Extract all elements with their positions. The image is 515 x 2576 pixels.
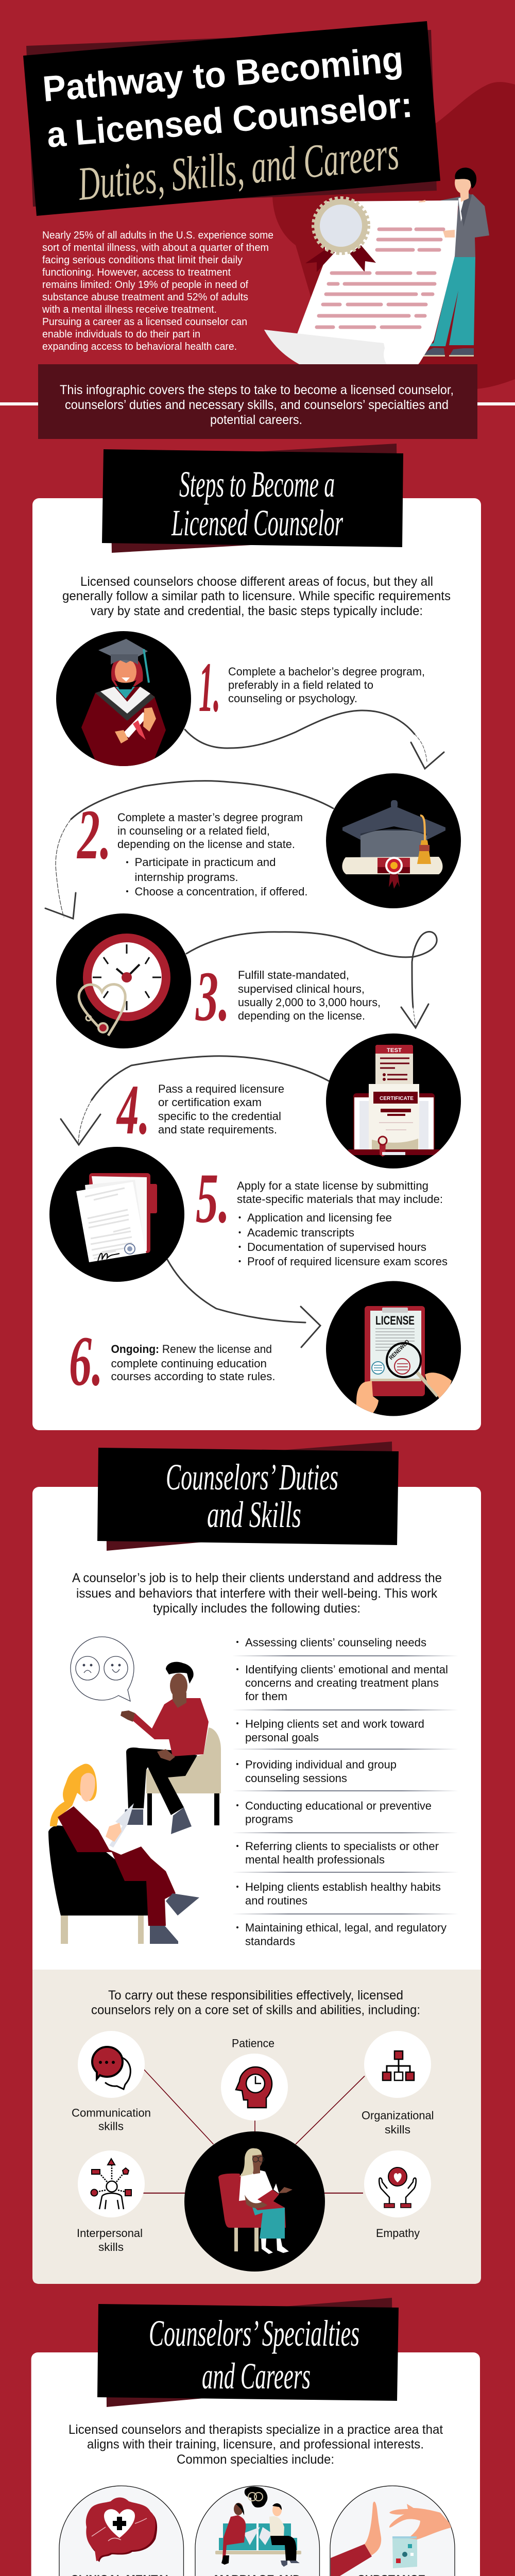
step text: and state requirements. [158,1123,277,1136]
step text [228,665,425,705]
skill: interpersonal [77,2150,145,2253]
skill connector lines [142,2067,365,2193]
intro paragraph: Nearly 25% of all adults in the U.S. experience some [42,230,273,241]
step text: Complete a master’s degree program [117,811,303,824]
illustration: counselor in chair [184,2131,325,2272]
card: clinical mental health [59,2486,183,2576]
duties intro text [72,1571,442,1616]
label: Interpersonal [77,2227,143,2240]
duties list: Identifying clients’ emotional and mental [245,1663,448,1676]
icon: test and certificate [348,1045,440,1157]
duties list: Conducting educational or preventive [245,1799,432,1812]
white divider [0,402,515,405]
skill: communication [72,2031,151,2133]
skill: patience [221,2037,288,2121]
step text: Choose a concentration, if offered. [135,885,308,898]
illustration: counseling session [48,1637,221,1944]
skill: empathy [364,2150,431,2240]
panel: specialties card [31,2352,480,2576]
duties intro text: issues and behaviors that interfere with their well-being. This work [76,1586,437,1601]
illustration: man holding diploma scroll [264,167,489,370]
duties list: programs [245,1812,293,1826]
duties list: Providing individual and group [245,1758,397,1771]
step text: Application and licensing fee [247,1211,392,1224]
label: Organizational [362,2109,434,2122]
intro paragraph: substance abuse treatment and 52% of adults [42,292,248,303]
specialties intro text: Licensed counselors and therapists specialize in a practice area that [68,2422,443,2437]
intro paragraph: Pursuing a career as a licensed counselor can [42,316,247,328]
intro callout box: potential careers. [210,413,302,427]
steps intro text: vary by state and credential, the basic steps typically include: [91,604,423,618]
step text: Academic transcripts [247,1226,354,1239]
step text [237,1179,448,1268]
label: Empathy [376,2227,420,2240]
label: Communication [72,2106,151,2120]
heading: specialties [97,2298,399,2407]
duties list: Assessing clients’ counseling needs [245,1636,426,1649]
step text: state-specific materials that may include: [237,1193,443,1206]
step number: 2. [77,795,111,874]
duties list: for them [245,1690,287,1703]
step 5 [49,1147,448,1282]
icon: graduate [81,639,166,768]
panel: steps card [32,498,481,1430]
card: marriage and family [195,2486,319,2576]
icon: license clipboard: LICENSE [375,1314,415,1328]
step 3 [56,913,381,1048]
intro callout box: This infographic covers the steps to take to become a licensed counselor, [60,383,454,397]
step text: usually 2,000 to 3,000 hours, [238,996,381,1009]
step text: counseling or psychology. [228,692,357,705]
specialties intro text [68,2422,443,2467]
label [362,2109,434,2136]
intro paragraph [42,230,273,352]
intro callout box [38,364,477,439]
step text: in counseling or a related field, [117,824,270,837]
step text: courses according to state rules. [111,1370,275,1383]
duties list: Maintaining ethical, legal, and regulatory [245,1921,447,1934]
duties list: personal goals [245,1731,319,1744]
background blob [272,82,515,389]
step 2 [77,773,461,908]
duties intro text: A counselor’s job is to help their clients understand and address the [72,1571,442,1585]
specialties intro text: Common specialties include: [177,2452,334,2467]
step number: 3. [195,957,230,1036]
heading: specialties: and Careers [202,2355,311,2397]
step text: Fulfill state-mandated, [238,969,349,981]
heading: duties: Counselors’ Duties [166,1456,338,1498]
panel: duties and skills card [32,1487,481,2284]
arrow: step 4 to 5 [61,1056,329,1145]
steps intro text [62,574,451,618]
label: Patience [232,2037,274,2049]
heading: steps: Licensed Counselor [171,502,344,544]
skills intro text: counselors rely on a core set of skills and abilities, including: [91,2003,420,2018]
steps intro text: Licensed counselors choose different areas of focus, but they all [80,574,433,589]
duties list: mental health professionals [245,1853,385,1866]
step 6 [69,1281,461,1419]
icon: brain with heart [86,2498,157,2562]
intro paragraph: sort of mental illness, with about a quarter of them [42,242,269,253]
step text [238,969,381,1022]
step text: Pass a required licensure [158,1082,284,1095]
step number: 4. [116,1070,150,1149]
step text: supervised clinical hours, [238,982,365,995]
skills intro text: To carry out these responsibilities effectively, licensed [108,1988,403,2003]
title line 1: Pathway to Becoming [41,39,405,109]
duties list: counseling sessions [245,1772,347,1785]
step text: specific to the credential [158,1110,281,1123]
illustration: refusing drugs [331,2502,453,2576]
step text: Documentation of supervised hours [247,1241,426,1253]
label [72,2106,151,2133]
duties list: concerns and creating treatment plans [245,1676,439,1689]
arrow: step 2 to 3 [45,781,333,919]
duties list [232,1636,460,1947]
steps intro text: generally follow a similar path to licensure. While specific requirements [62,589,451,603]
duties list: and routines [245,1894,307,1907]
icon: test and certificate: TEST [387,1047,402,1054]
icon: graduation cap and diploma [342,800,445,889]
heading: steps: Steps to Become a [179,464,335,505]
skills intro text [91,1988,420,2018]
intro paragraph: with a mental illness receive treatment. [42,304,217,315]
illustration: couple on sofa [215,2486,301,2567]
intro paragraph: enable individuals to do their part in [42,329,200,340]
woman [48,1825,148,1916]
step text: Participate in practicum and [135,856,276,869]
duties list: Helping clients establish healthy habits [245,1880,441,1893]
arrow: step 1 to 2 [185,710,444,769]
specialties intro text: aligns with their training, licensure, and professional interests. [87,2437,424,2451]
step text: Apply for a state license by submitting [237,1179,428,1192]
chair [146,1727,221,1793]
heading: duties [97,1442,399,1551]
label: skills [385,2123,410,2136]
intro paragraph: functioning. However, access to treatment [42,267,231,278]
step text: Complete a bachelor’s degree program, [228,665,425,678]
skill: organizational [362,2031,434,2136]
arrow: step 5 to 6 [167,1260,320,1347]
step text [158,1082,284,1136]
duties intro text: typically includes the following duties: [153,1601,360,1616]
icon: license clipboard [355,1306,452,1419]
step text [117,811,308,898]
duties list: Helping clients set and work toward [245,1718,424,1730]
title line 2: a Licensed Counselor: [45,84,414,155]
step text: depending on the license and state. [117,838,295,851]
step text [111,1343,275,1383]
step 4 [116,1033,461,1168]
panel: core skills [32,1970,481,2284]
step number: 6. [69,1321,103,1400]
heading: duties: and Skills [207,1494,301,1535]
title banner [23,21,440,216]
step text: or certification exam [158,1096,262,1109]
step text: Ongoing: Renew the license and [111,1343,272,1355]
icon: test and certificate: CERTIFICATE [380,1096,414,1101]
icon: license clipboard: RENEWED [388,1338,411,1361]
step number: 5. [196,1159,230,1238]
intro paragraph: expanding access to behavioral health care. [42,341,237,352]
step 1: 1. [199,648,220,726]
intro paragraph: remains limited: Only 19% of people in need of [42,279,248,291]
icon: speech bubble with faces [71,1637,134,1701]
label: skills [98,2120,124,2133]
intro paragraph: facing serious conditions that limit their daily [42,255,243,266]
arrow: step 3 to 4 [186,931,437,1028]
icon: clock and stethoscope [79,934,170,1036]
duties list: Referring clients to specialists or other [245,1840,439,1853]
step text: depending on the license. [238,1009,365,1022]
label: skills [98,2241,124,2253]
card: substance abuse [330,2486,455,2576]
heading: steps [102,444,403,553]
step text: Proof of required licensure exam scores [247,1255,448,1268]
step text: complete continuing education [111,1357,267,1370]
icon: document folder [76,1173,157,1262]
intro callout box: counselors’ duties and necessary skills, and counselors’ specialties and [65,398,449,412]
step text: internship programs. [135,871,238,884]
heading: specialties: Counselors’ Specialties [149,2313,359,2354]
step 1 [56,631,425,768]
duties list: standards [245,1935,295,1947]
man [126,1748,197,1815]
step text: preferably in a field related to [228,679,373,691]
label [77,2227,143,2253]
